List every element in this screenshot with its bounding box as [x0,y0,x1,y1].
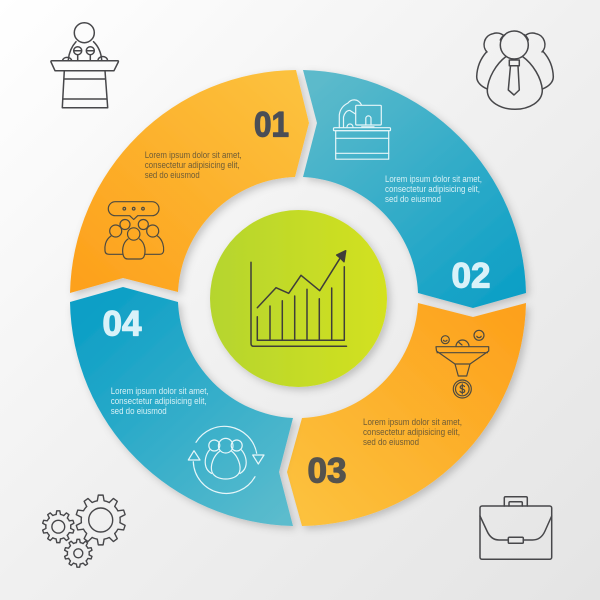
icon: briefcase [480,497,552,559]
panel: segment 04 [70,287,293,526]
text block 03: consectetur adipisicing elit, [363,427,460,437]
segment 01 shape [70,70,309,293]
number 04: 04 [102,304,142,344]
number 03: 03 [308,452,346,490]
text block 03: Lorem ipsum dolor sit amet, [363,417,462,427]
icon: speaker at podium [51,23,118,108]
icon: team rotation [188,426,264,493]
panel: segment 03 [287,303,526,526]
text block 04: sed do eiusmod [111,406,167,416]
center circle [210,210,387,387]
segment 03 shape [287,303,526,526]
panel: segment 01 [70,70,309,293]
icon: gears [41,495,127,567]
text block 03: sed do eiusmod [363,437,419,447]
text block 01: sed do eiusmod [145,170,200,180]
text block 04: Lorem ipsum dolor sit amet, [111,386,209,396]
icon: business team [477,31,553,109]
icon: funnel and coin [436,330,489,398]
text block 02: sed do eiusmod [385,194,441,204]
medium gear [41,511,75,543]
number 02: 02 [452,256,490,296]
number 01: 01 [254,106,289,144]
segment 04 shape [70,287,293,526]
icon: audience with speech bubble [105,202,164,259]
text block 04: consectetur adipisicing elit, [111,396,207,406]
text block 02: consectetur adipisicing elit, [385,184,480,194]
text block 02: Lorem ipsum dolor sit amet, [385,174,482,184]
big gear [74,495,127,545]
small gear [64,539,93,567]
icon: growth chart [251,251,346,346]
text block 01: Lorem ipsum dolor sit amet, [145,150,242,160]
icon: person at desk [334,100,390,159]
segment 02 shape [303,70,526,308]
text block 01: consectetur adipisicing elit, [145,160,240,170]
panel: segment 02 [303,70,526,308]
